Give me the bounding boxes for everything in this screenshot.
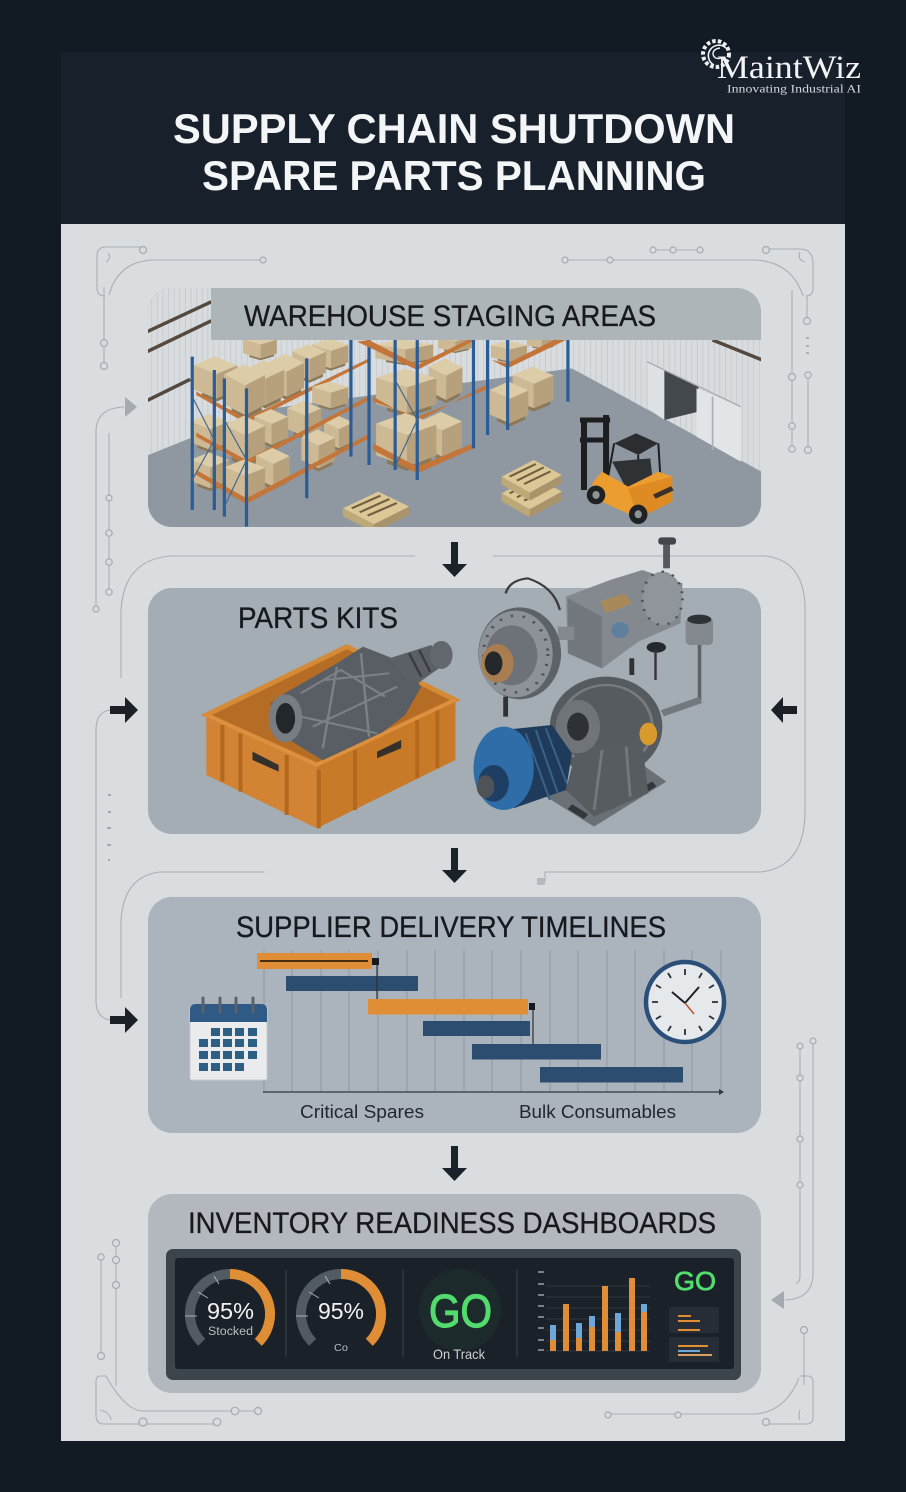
status: go on track — [419, 1269, 501, 1362]
panel: warehouse staging areas — [148, 288, 761, 527]
gauge: 95% — [296, 1274, 381, 1354]
header band — [61, 41, 861, 224]
logo: MaintWiz: Innovating Industrial AI — [727, 82, 861, 96]
forklift — [580, 415, 672, 524]
storage doors — [647, 362, 741, 462]
mini status panels — [669, 1307, 719, 1362]
panel: inventory readiness dashboards — [148, 1194, 761, 1393]
title: SUPPLY CHAIN SHUTDOWN — [173, 105, 735, 152]
panel: parts kits — [148, 537, 761, 834]
status: go on track: On Track — [433, 1346, 486, 1362]
title band — [211, 288, 761, 340]
light content panel — [61, 224, 845, 1441]
heading: parts kits: PARTS KITS — [238, 602, 398, 635]
gearbox housing — [269, 641, 453, 762]
exploded machinery — [473, 537, 713, 827]
arrow: parts kits to supplier timelines — [442, 848, 467, 883]
heading: inventory readiness dashboards: INVENTORY READINESS DASHBOARDS — [188, 1207, 716, 1240]
left storage rack — [190, 334, 369, 527]
gauge: stocked 95% — [185, 1274, 270, 1342]
gauge: 95%: 95% — [318, 1298, 364, 1324]
status: go on track: GO — [429, 1285, 492, 1337]
bar chart — [538, 1272, 650, 1351]
logo: MaintWiz: MaintWiz — [717, 50, 861, 86]
status: small go: GO — [674, 1266, 716, 1296]
gantt chart — [257, 950, 724, 1095]
gauge: 95%: Co — [334, 1343, 348, 1354]
title — [173, 105, 735, 199]
heading: supplier delivery timelines: SUPPLIER DELIVERY TIMELINES — [236, 911, 666, 944]
gauge: stocked 95%: 95% — [207, 1298, 254, 1324]
dashboard screen — [166, 1249, 741, 1380]
circuit decorations and flow lines — [93, 246, 816, 1426]
right storage rack — [490, 333, 568, 430]
pallets — [343, 460, 562, 532]
heading: warehouse staging areas: WAREHOUSE STAGING AREAS — [244, 300, 656, 333]
arrow: left input to supplier timelines — [110, 1007, 138, 1033]
arrow: left input to parts kits — [110, 697, 138, 723]
orange crate with gearbox — [206, 641, 455, 828]
gauge: stocked 95%: Stocked — [208, 1326, 253, 1338]
warehouse walls and floor — [148, 288, 761, 527]
arrow: supplier timelines to dashboards — [442, 1146, 467, 1181]
title: SPARE PARTS PLANNING — [202, 152, 706, 199]
label: critical spares: Critical Spares — [300, 1102, 424, 1122]
icon: clock — [646, 962, 724, 1042]
logo: MaintWiz — [703, 41, 861, 96]
middle storage rack — [357, 334, 488, 480]
arrow: warehouse to parts kits — [442, 542, 467, 577]
arrow: right input to parts kits — [771, 697, 797, 723]
label: bulk consumables: Bulk Consumables — [519, 1102, 676, 1122]
panel: supplier delivery timelines — [148, 897, 761, 1133]
icon: calendar — [190, 998, 267, 1080]
